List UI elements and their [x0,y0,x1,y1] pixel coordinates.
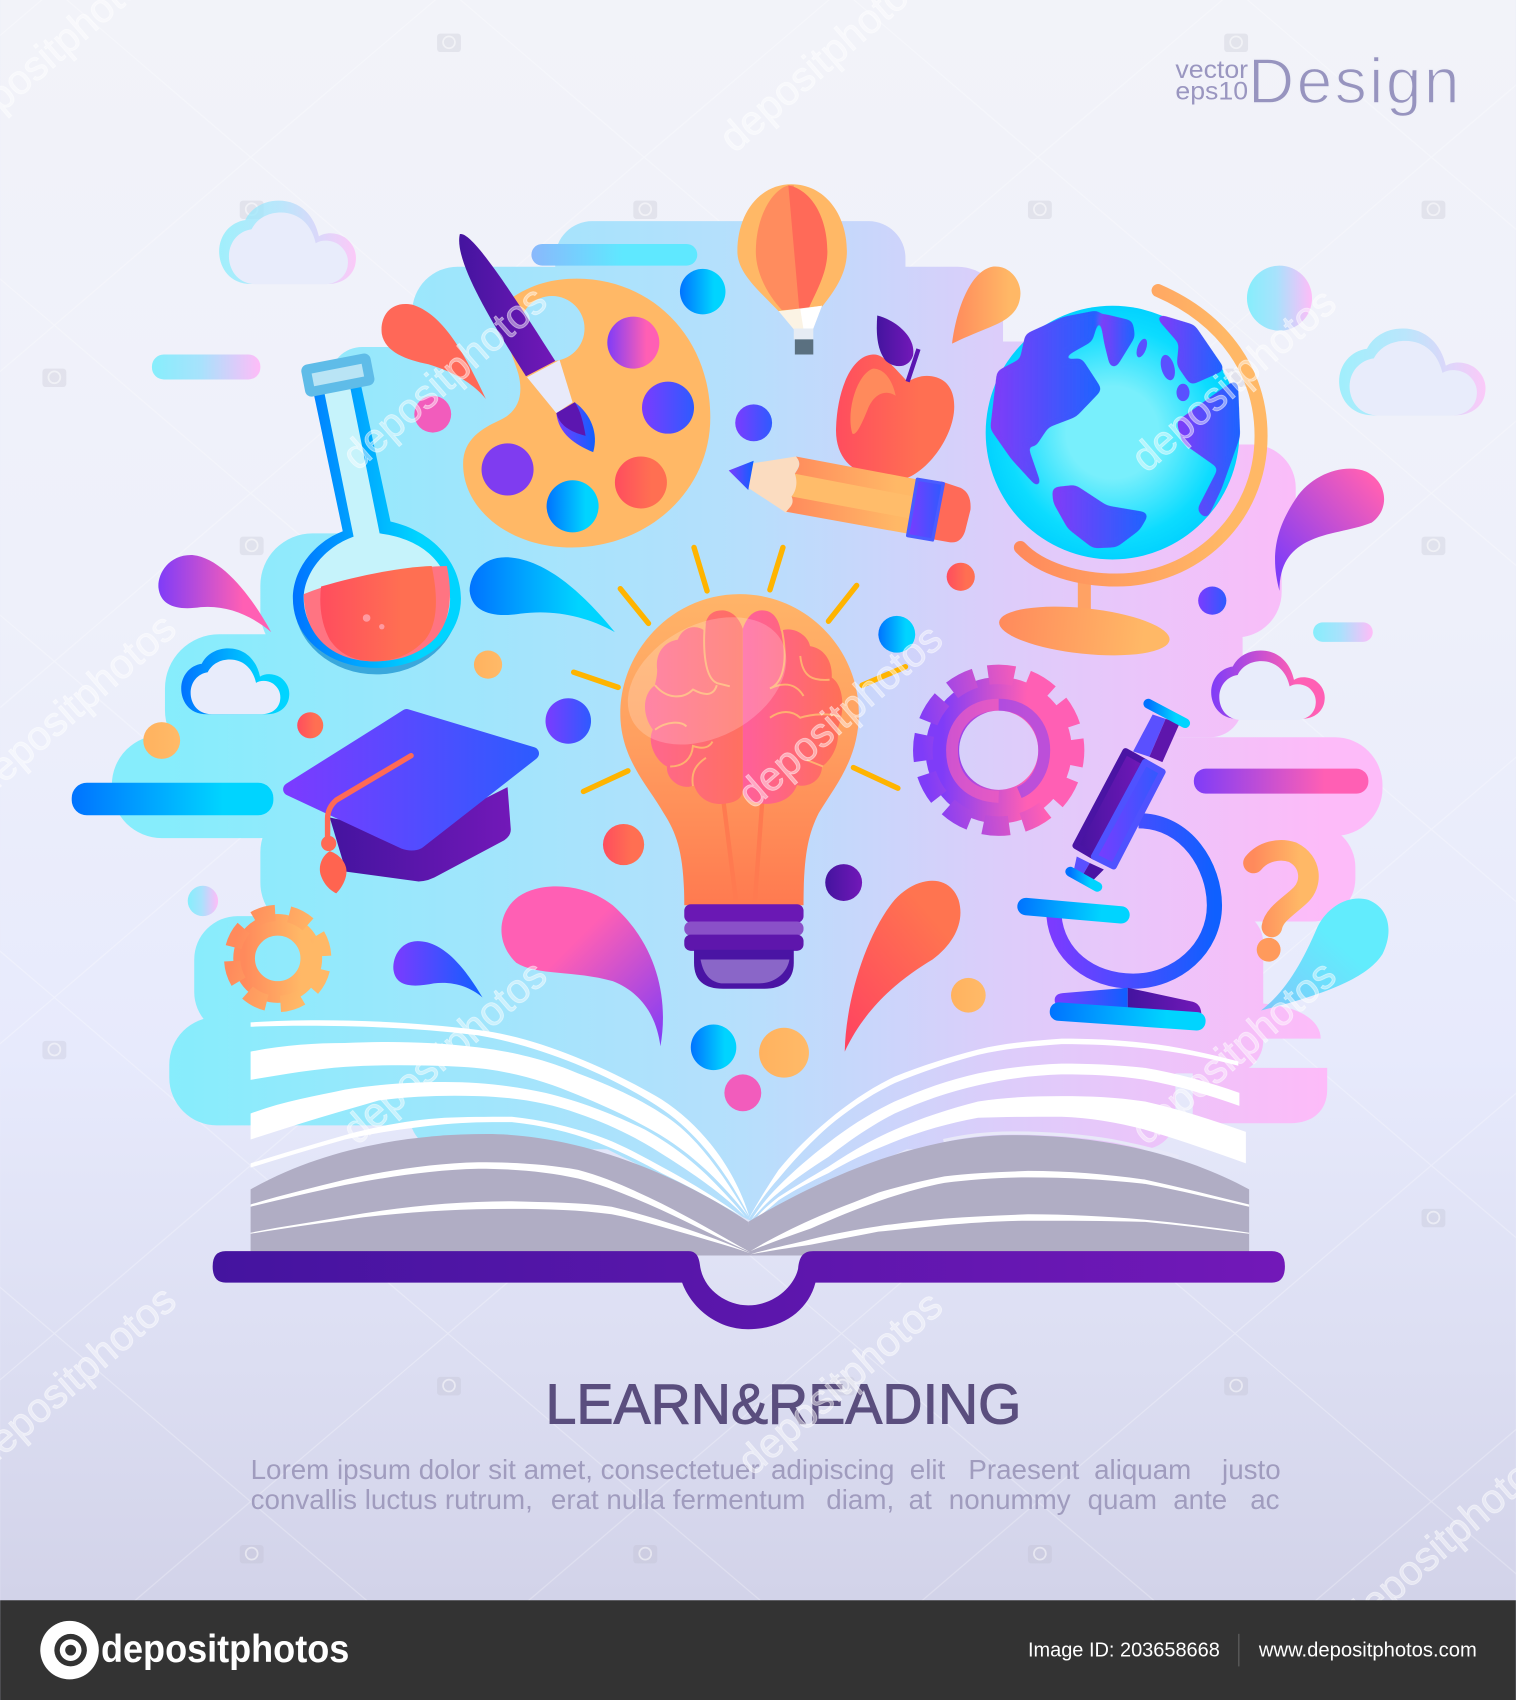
microscope base [1049,988,1206,1031]
bulb screw base [684,904,804,989]
small islands [1134,337,1190,401]
logo wordmark: depositphotos [101,1628,349,1671]
body text: quam [1088,1484,1157,1515]
body text: nonummy [949,1484,1071,1515]
pills [72,244,1373,815]
body text: Praesent [968,1454,1080,1485]
brain folds [655,623,840,786]
icon: graduation cap [290,716,532,893]
flask cap [300,352,376,398]
open book [213,1020,1285,1329]
icon: question mark [1253,850,1308,962]
body text: convallis luctus rutrum, [251,1484,533,1515]
cloud: faint top right [1339,329,1486,416]
white flying pages [251,1020,1246,1220]
depositphotos diagonal watermarks: depositphotos [1122,279,1345,481]
icon: apple [836,315,954,480]
website: www.depositphotos.com [1258,1639,1477,1662]
microscope stage [1017,897,1130,924]
icon: paint palette with brush [459,234,710,548]
vector eps10 Design label: Design [1248,45,1459,117]
title: LEARN&READING [546,1373,1021,1436]
brain left [645,610,743,804]
icon: chemistry flask [293,352,461,674]
body text: ante [1173,1484,1227,1515]
body text: adipiscing [771,1454,894,1485]
body text: Lorem ipsum dolor sit amet, consectetuer [251,1454,760,1485]
rays [574,548,905,791]
body text: erat nulla fermentum [551,1484,805,1515]
cloud: blue outline [181,648,289,714]
depositphotos diagonal watermarks: depositphotos [1122,951,1345,1153]
depositphotos diagonal watermarks: depositphotos [333,951,555,1153]
paint dots [482,317,694,532]
vector eps10 Design label: eps10 [1175,78,1248,106]
bulb highlight [606,591,808,770]
white page lines [251,1162,1249,1254]
icon: large purple gear [913,665,1084,836]
icon: camera logo [40,1621,99,1679]
thumb hole [519,296,585,361]
cloud: pink outline [1211,651,1325,720]
body text: diam, [826,1484,894,1515]
icon: small orange gear [223,903,333,1014]
book cover [213,1251,1285,1329]
globe ring and stand [997,291,1261,663]
footer bar [0,1600,1516,1700]
icon: hot air balloon [737,184,847,355]
microscope arm [1054,821,1214,981]
bulb glass [620,594,859,905]
body text: elit [910,1454,946,1485]
icon: pencil [729,456,971,542]
body text [251,1454,1281,1515]
vector eps10 Design label: vector [1175,56,1248,84]
depositphotos diagonal watermarks: depositphotos [729,1282,951,1484]
body text: ac [1250,1484,1280,1515]
icon: light bulb with brain [574,548,905,989]
icon: microscope [1017,704,1214,1031]
microscope tube [1070,704,1185,887]
background cloud blob [112,221,1382,1221]
tassel [320,756,411,893]
flask liquid [304,566,450,661]
flask glass [293,386,461,674]
teardrop splashes [158,267,1389,1052]
continents [993,313,1237,545]
body text: aliquam [1094,1454,1191,1485]
cloud: faint top left [219,201,356,284]
confetti dots [143,266,1312,1111]
palette board [463,279,710,548]
grey page block [251,1133,1249,1255]
depositphotos diagonal watermarks: depositphotos [333,277,555,479]
globe sphere [986,306,1239,559]
icon: globe [986,291,1261,663]
depositphotos diagonal watermarks: depositphotos [729,615,951,817]
body text: at [909,1484,932,1515]
body text: justo [1221,1454,1281,1485]
brush [459,234,595,452]
brain right [743,610,842,804]
filament stems [723,800,762,903]
image id: Image ID: 203658668 [1028,1639,1220,1662]
